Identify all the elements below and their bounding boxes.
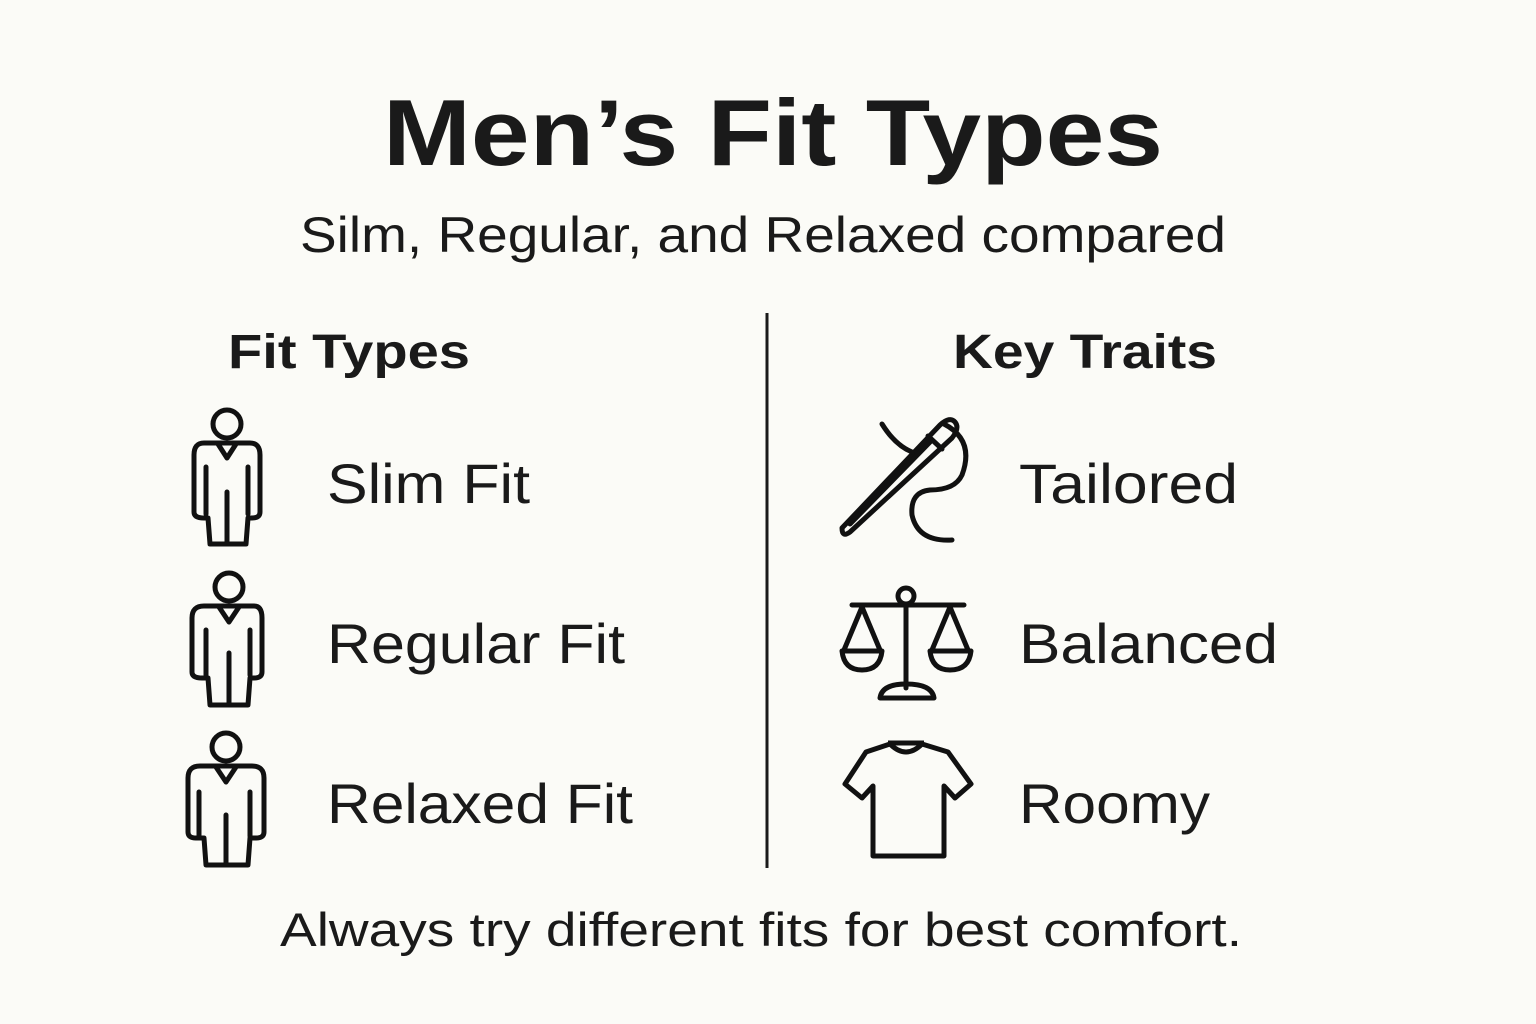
label: tailored: Tailored — [1019, 452, 1238, 515]
label: balanced: Balanced — [1019, 612, 1278, 675]
icon: relaxed person — [188, 733, 264, 865]
subtitle: Silm, Regular, and Relaxed compared — [300, 207, 1226, 263]
label: relaxed fit: Relaxed Fit — [327, 772, 633, 835]
label: regular fit: Regular Fit — [327, 612, 625, 675]
heading: key traits: Key Traits — [953, 326, 1217, 379]
icon: balance scale — [842, 588, 971, 698]
icon: slim person — [194, 410, 260, 544]
label: roomy: Roomy — [1019, 772, 1210, 835]
icon: t-shirt — [845, 743, 971, 856]
title: Men’s Fit Types — [383, 80, 1163, 185]
icon: regular person — [192, 573, 262, 705]
label: slim fit: Slim Fit — [327, 452, 530, 515]
heading: fit types: Fit Types — [228, 326, 470, 379]
footer note: Always try different fits for best comfort. — [280, 903, 1242, 956]
icon: needle and thread — [842, 420, 966, 540]
